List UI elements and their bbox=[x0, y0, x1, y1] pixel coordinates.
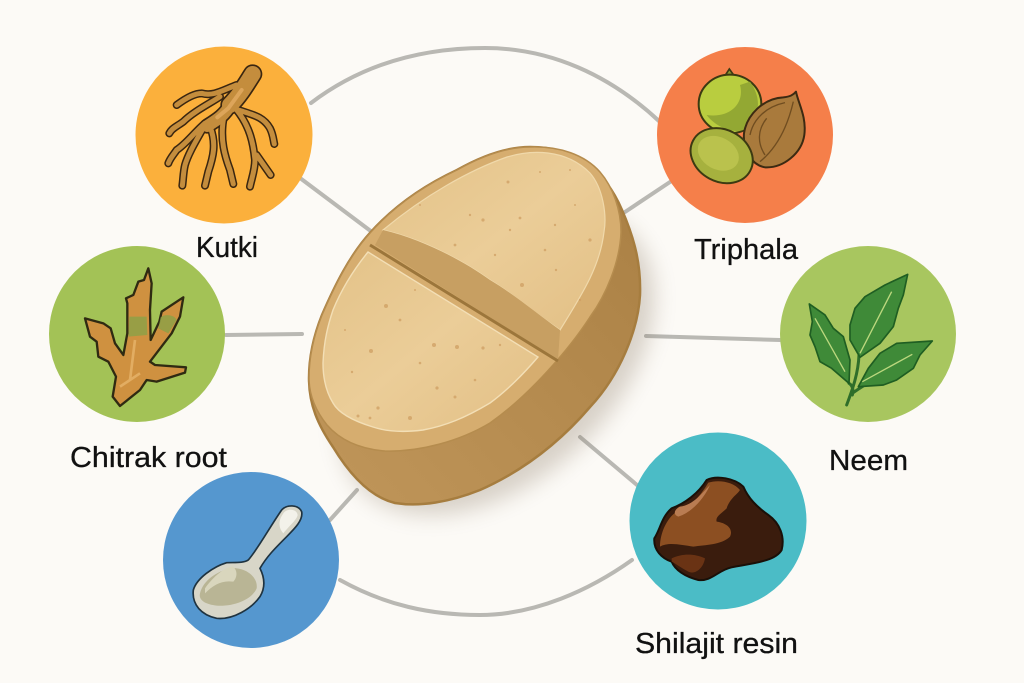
circle: Kutki bbox=[136, 46, 312, 224]
ingredient: Kutki bbox=[136, 46, 312, 264]
tablet speckles bbox=[344, 169, 592, 420]
label: Shilajit resin: Shilajit resin bbox=[635, 628, 798, 660]
tablet shadow bbox=[281, 150, 713, 574]
circle: Chitrak root bbox=[49, 246, 225, 422]
circle: Neem bbox=[780, 246, 956, 422]
icon: Triphala fruits bbox=[681, 69, 805, 194]
ingredient: Chitrak root bbox=[49, 246, 227, 474]
ingredient: Neem bbox=[780, 246, 956, 477]
circle: Shilajit resin bbox=[630, 432, 806, 610]
tablet upper half face bbox=[383, 152, 605, 330]
tablet score groove wall bbox=[375, 230, 560, 360]
icon: spoon with powder bbox=[193, 506, 302, 618]
label: Kutki: Kutki bbox=[196, 232, 258, 264]
icon: Shilajit resin lump bbox=[654, 478, 783, 580]
central tablet bbox=[281, 147, 713, 574]
circle: spoon bbox=[163, 472, 339, 648]
tablet body bbox=[309, 147, 640, 504]
tablet top rim bbox=[309, 147, 621, 451]
circle: Triphala bbox=[657, 47, 833, 223]
label: Triphala: Triphala bbox=[694, 234, 799, 266]
connector lines bbox=[226, 48, 780, 615]
icon: Neem leaves bbox=[809, 274, 932, 405]
tablet score line bbox=[370, 245, 558, 361]
tablet lower half face bbox=[323, 252, 538, 431]
icon: Kutki root bbox=[168, 74, 274, 187]
label: Chitrak root: Chitrak root bbox=[70, 442, 227, 474]
ingredient: spoon bbox=[163, 472, 339, 648]
icon: Chitrak root bbox=[85, 268, 186, 406]
label: Neem: Neem bbox=[829, 445, 908, 477]
ingredient: Triphala bbox=[657, 47, 833, 266]
ingredient: Shilajit resin bbox=[630, 432, 806, 660]
